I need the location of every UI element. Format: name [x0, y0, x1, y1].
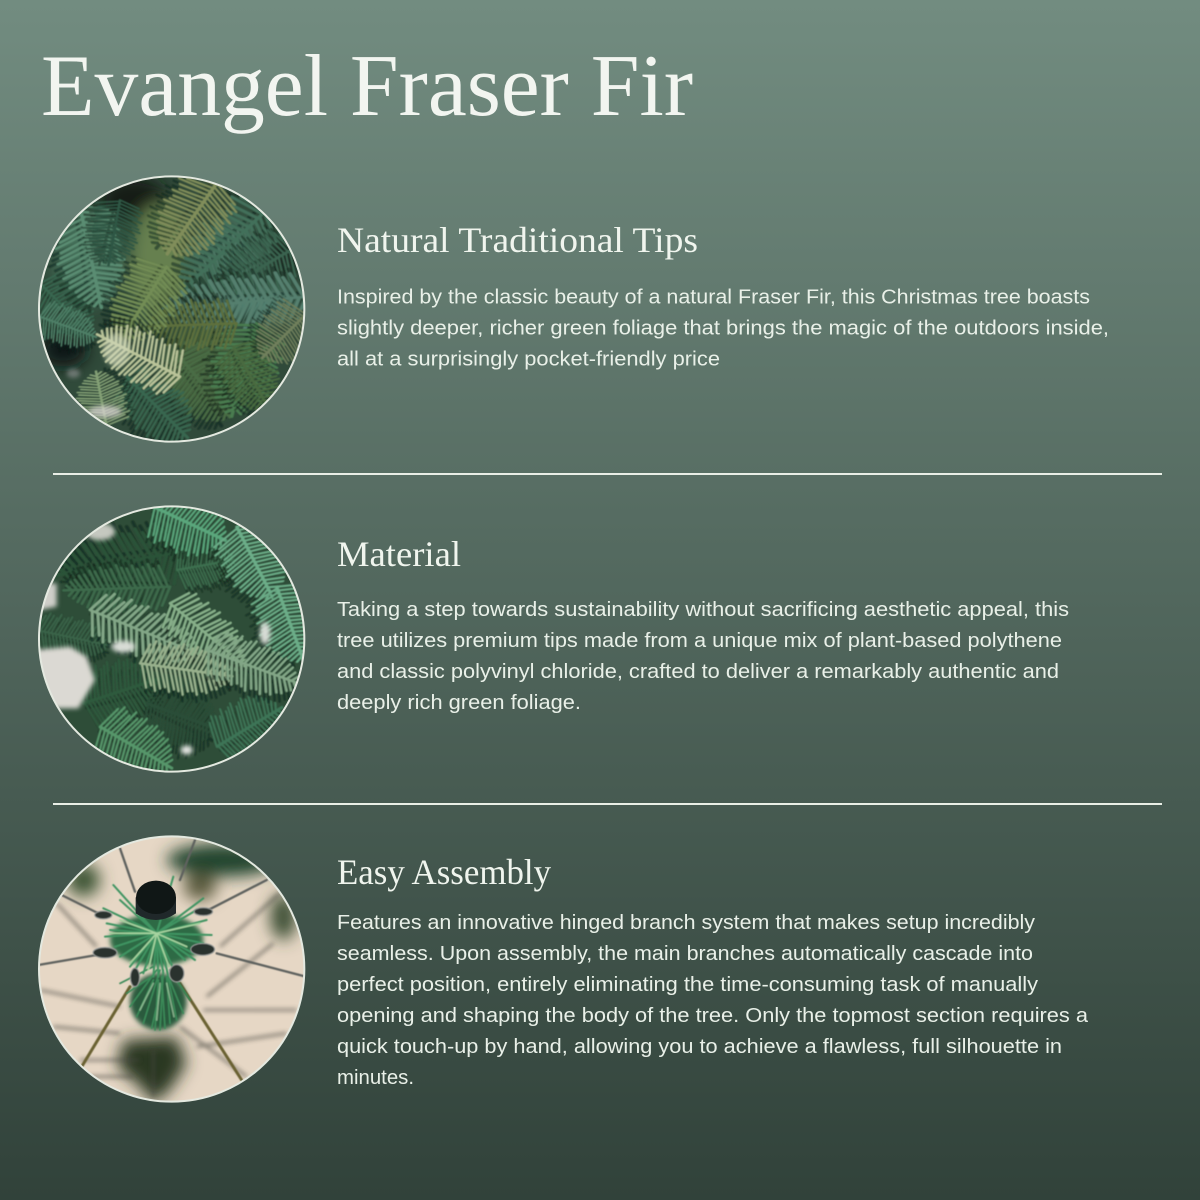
text block: natural traditional tips description [337, 286, 1109, 370]
text block: material description: and classic polyvinyl chloride, crafted to deliver a remarkably authentic and [337, 660, 1059, 683]
heading: material: Material [337, 534, 461, 574]
photo: fir branch against pale background [38, 505, 306, 773]
text block: material description: tree utilizes premium tips made from a unique mix of plant-based polythene [337, 629, 1062, 652]
text block: easy assembly description [337, 911, 1089, 1089]
text block: material description: deeply rich green foliage. [337, 691, 581, 714]
text block: easy assembly description: quick touch-up by hand, allowing you to achieve a flawless, full silhouette in [337, 1035, 1062, 1058]
text block: material description: Taking a step towards sustainability without sacrificing aesthetic appeal, this [337, 598, 1069, 621]
panel: material [38, 505, 1068, 773]
photo: hinged branch system from above [37, 833, 307, 1103]
heading: natural traditional tips: Natural Traditional Tips [337, 220, 698, 260]
hub tuft [103, 877, 212, 1030]
panel: easy assembly [37, 833, 1089, 1103]
text block: easy assembly description: Features an innovative hinged branch system that makes setup incredibly [337, 911, 1036, 934]
text block: natural traditional tips description: slightly deeper, richer green foliage that brings the magic of the outdoors inside, [337, 316, 1109, 340]
panel: natural traditional tips [38, 175, 1107, 443]
text block: material description [337, 598, 1069, 714]
text block: easy assembly description: perfect position, entirely eliminating the time-consuming task of manually [337, 973, 1039, 996]
hinge brackets [93, 908, 215, 987]
text block: easy assembly description: minutes. [337, 1066, 414, 1089]
hub cylinder [136, 881, 176, 920]
photo: fir branches close-up [38, 175, 306, 443]
text block: natural traditional tips description: Inspired by the classic beauty of a natural Fraser Fir, this Christmas tree boasts [337, 286, 1090, 308]
heading: easy assembly: Easy Assembly [337, 852, 551, 892]
title: Evangel Fraser Fir [41, 38, 693, 135]
text block: easy assembly description: opening and shaping the body of the tree. Only the topmost section requires a [337, 1004, 1089, 1027]
text block: natural traditional tips description: all at a surprisingly pocket-friendly price [337, 348, 720, 370]
text block: easy assembly description: seamless. Upon assembly, the main branches automatically cascade into [337, 942, 1033, 965]
